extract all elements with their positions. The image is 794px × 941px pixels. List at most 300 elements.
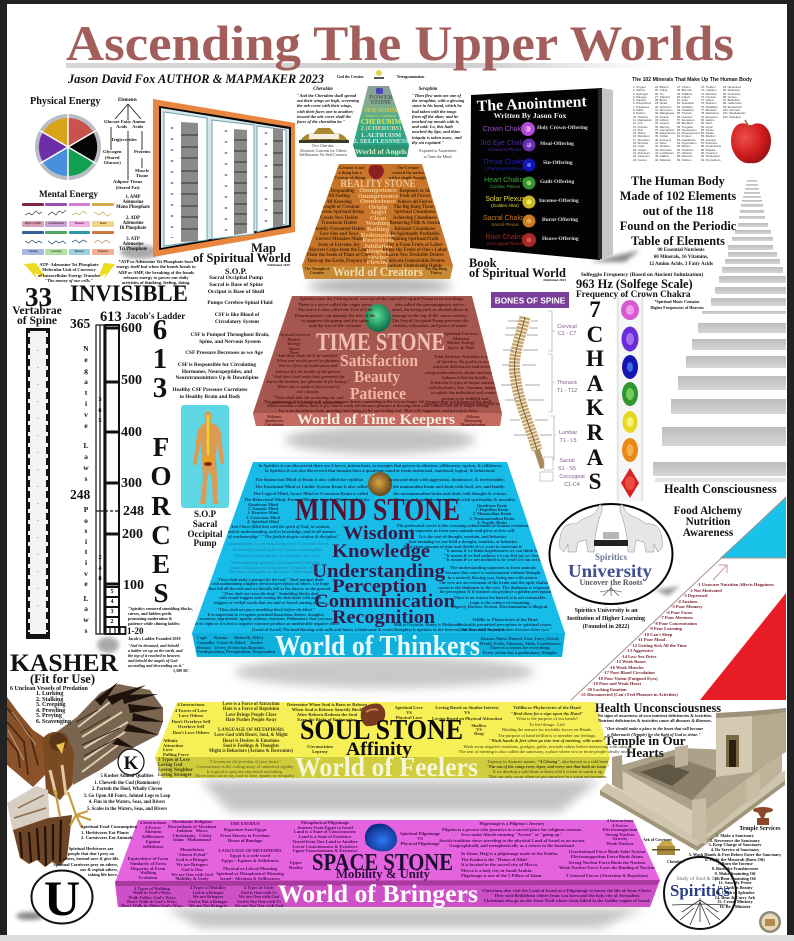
text: soul stone content: This can only occur when we put ourselves in a warm environment.	[488, 774, 608, 779]
figure: spine bones	[501, 311, 556, 481]
text: space stone content: Christians also go on the Jesus Trail where Jesus hiked in the Galilee region of Israel.	[484, 898, 650, 903]
text: space stone content: Geographically and metaphorically as a return to the homeland.	[449, 843, 575, 848]
text: mind stone content: Quadrune Mind	[248, 502, 278, 507]
text: minerals columns: 67. Hafnium	[677, 151, 692, 155]
text: soul stone content: Wash away negative emotions, grudges, guilts, towards others before interacting with others.	[463, 744, 631, 748]
text: soul stone content: Deep	[474, 731, 484, 736]
text: spiritual music: Higher Frequencies of Heavens	[650, 304, 704, 310]
text: reality stone content: Achieving Cleanliness	[393, 216, 437, 221]
text: space stone content: Descendants of Abraham	[168, 824, 216, 829]
heading: 365: 365	[70, 316, 90, 331]
text: services items: 7. Burn the Incense	[717, 861, 753, 866]
text: space stone content: We are Not Bringers	[189, 903, 227, 908]
text: kosher qualities	[84, 774, 170, 812]
text: time stone content: Measuring	[464, 419, 482, 423]
text: book chakra labels: Coccygeal Plexus	[487, 240, 523, 246]
staircase	[653, 180, 786, 482]
text: reality stone content: Making Spiritual Profit	[391, 237, 439, 242]
text: reality stone content: Redemption	[361, 232, 395, 238]
text: spiritual food	[81, 824, 138, 840]
text: mind stone content: triggers or verbal words that are said or heard causing a crime	[214, 600, 326, 605]
heading: 7 chakras	[586, 297, 604, 494]
text: soul stone content: The tent of meeting is also called the sanctuary, a place where two or more people ideally interact.	[459, 749, 635, 754]
text: mind stone content: "And they shall be for frontlets between thine eyes."	[458, 627, 552, 632]
text: minerals columns: 58. Beryllium	[677, 121, 693, 125]
text: energy tree labels: Glycogen	[103, 149, 121, 154]
text: minerals columns: 78. Ruthenium	[701, 111, 719, 115]
mind stone virtues: Wisdom	[343, 523, 415, 544]
text: minerals columns: 39. Cobalt	[655, 134, 668, 138]
text: mind stone content: name of an object in front of you in hand to feel it.	[231, 565, 319, 570]
text: spiritics stumbling note: "Spiritics removed stumbling blocks,	[128, 606, 193, 611]
text: ladder scale numbers: 1-20	[127, 626, 144, 636]
icon: ark of covenant	[652, 841, 680, 855]
text: reality stone content: The Big Bang	[425, 267, 447, 271]
text: reality stone content: Knows all Forces	[398, 200, 432, 205]
heading: 6 1 3: 6	[153, 314, 167, 346]
text: services items: 15. Create Ministry	[717, 899, 753, 904]
text: space stone content: Metaphorical Pilgrimage	[301, 820, 349, 825]
text: nutrition deficiency list: -7 Poor Alertness	[660, 615, 693, 620]
text: minerals columns: 8. Sulfur	[633, 108, 643, 112]
text: minerals columns: 87. Polonium	[701, 141, 717, 145]
text: mind stone content: Understanding is conceptualizing the 613 invisible forces	[228, 541, 328, 546]
text: negative laws vertical: a	[84, 452, 88, 461]
text: time stone content: Space	[289, 346, 299, 350]
text: minerals columns: 70. Thulium	[701, 85, 716, 89]
text: mind stone content: for perception & if trained can produce a golden perception.	[440, 589, 552, 594]
text: space stone content: LANGUAGE OF METAPHORS	[218, 848, 282, 853]
text: mind stone content: The eyes are an extension of the brain and the optic thalamus	[439, 580, 553, 585]
text: soul stone content: Love Brings People Close	[226, 713, 276, 718]
heading: kasher: KASHER	[10, 648, 118, 677]
text: minerals columns: 12. Iron	[633, 121, 642, 125]
text: mind stone content: Desirable permitted perception or spiritual vision.	[458, 622, 552, 627]
heading: 6 1 3: 1	[153, 343, 167, 375]
text: nutrition deficiency list: -14 Low Sex Drive	[621, 654, 656, 658]
text: minerals columns: 72. Rhenium	[701, 92, 717, 96]
text: space stone content: God is One	[181, 867, 203, 872]
seal: spiritics roots: Spiritics	[670, 881, 730, 900]
text: minerals columns: 53. Tantalum	[677, 105, 693, 109]
ark of cherubs icon	[299, 128, 349, 143]
icon: ATP lightning bolts	[24, 263, 115, 279]
text: minerals columns: 65. Erbium	[677, 144, 691, 148]
text: unclean vessels: 6 Unclean Vessels of Predation	[10, 686, 88, 692]
seal: spiritics university: Spiritics	[595, 552, 627, 562]
text: spine region labels: Cervical	[557, 324, 577, 330]
text: seraphim quote: touched my mouth with it,	[412, 119, 459, 124]
text: space stone content: 4 Interactions	[140, 820, 166, 825]
text: book chakra labels: Heave-Offering	[542, 236, 579, 242]
text: space stone content: Lower Consciousness & Existence	[292, 844, 358, 849]
text: time stone content: one's beauty.	[296, 389, 320, 394]
text: ATP currency: "The money of our cells."	[45, 278, 93, 283]
text: ladder scale numbers: 500	[121, 373, 142, 388]
text: time stone content: Space, & Time	[448, 345, 474, 350]
text: seraphim quote: thy sin expiated."	[412, 140, 444, 145]
text: minerals columns: 68. Holmium	[677, 154, 693, 158]
text: time stone content: anoint it upon his head, and anoint him."	[270, 400, 346, 405]
text: mind stone content: (Land of Israel) The land flowing with milk and honey (wholesome & sweet thoughts) is upstairs in the heavens, the heavenly, the mind	[252, 627, 504, 632]
text: minerals columns: 75. Platinum	[701, 101, 717, 105]
text: minerals columns: 16. Rubidium	[633, 134, 649, 138]
text: space stone content: Travel from One Land to Another	[292, 839, 358, 844]
heading: 7 chakras: H	[586, 346, 604, 371]
text: nutrition deficiency list: -2 Not Motivated	[689, 588, 722, 592]
text: space stone content: Walking	[140, 870, 156, 875]
text: minerals columns: 20. Copper	[633, 148, 647, 152]
text: soul stone content: The purpose of hand tefillin is to member our feelings.	[498, 732, 596, 738]
text: time stone content: Calculating	[265, 423, 283, 427]
text: mind stone content: It separates us from most animals and gives us free will.	[411, 528, 515, 533]
text: minerals columns: 35. Cesium	[655, 121, 669, 125]
text: predation list: 5. Preying	[36, 713, 62, 719]
text: soul stone content: Hate Pushes People Away	[225, 718, 277, 723]
text: nutrition deficiency list: -21 Disconnected (Can't Feel Pleasure in Activities)	[580, 692, 678, 697]
text: nutrition deficiency list: -11 Poor Mood	[637, 637, 665, 642]
text: ATP currency: of Intracellular Energy Transfer	[38, 273, 100, 278]
text: kosher qualities: 3. Go Upon All Fours, Jointed Legs to Leap	[84, 794, 170, 798]
text: reality stone content: Omniscience	[360, 198, 396, 205]
text: jacob's ladder quote: ascending and descending on it."	[128, 663, 184, 668]
map shadow	[120, 245, 160, 259]
text: reality stone content: Creator of things	[334, 175, 366, 180]
pyramid shadow: mind	[235, 656, 535, 688]
text: energy tree labels: Elements	[118, 98, 137, 103]
text: space stone content: Mecca is a holy city in Saudi Arabia.	[461, 868, 532, 872]
text: space stone content: Pilgrimage is a Pilgrim's Journey	[479, 821, 545, 826]
text: minerals columns: 80. Helium	[701, 118, 714, 122]
text: soul stone content: "Put out of the camp every leper, and every one that hath an issue."	[487, 764, 609, 769]
text: book chakra labels: Sacral Chakra	[483, 215, 527, 222]
text: mind stone content: emotions, ingratitude, apathy, actions, reactions. Defamatory that you may	[199, 616, 333, 621]
pyramid shadow: space	[165, 908, 645, 928]
text: space stone content: God is Not a Bringer	[188, 898, 228, 904]
heading: forces: F	[153, 432, 169, 462]
text: jacob's ladder quote	[128, 636, 189, 673]
text: minerals columns: 44. Lanthanum	[655, 151, 674, 155]
text: seraphim quote: "Then flew unto me one of	[412, 93, 461, 98]
text: minerals columns: 32. Manganese	[655, 111, 674, 115]
text: nutrition deficiency list: -18 Poor Vision (Fatigued Eyes)	[597, 676, 658, 680]
heading: forces: C	[151, 520, 171, 550]
text: reality stone content: Removing Filth & Stench	[390, 221, 440, 226]
text: space stone content: It is located in the sacred city of Mecca.	[461, 862, 538, 867]
text: minerals columns: 7. Potassium	[633, 105, 649, 109]
text: minerals columns: 36. Mercury	[655, 125, 670, 129]
text: spine region labels: Lumbar	[559, 430, 577, 436]
text: mind stone content: with maintaining a higher, elevated perception of others. Use hope	[211, 581, 329, 586]
text: neurotransmitter labels: Memory	[75, 250, 84, 253]
text: reality stone content: Create New Habits	[320, 216, 358, 221]
text: angels pyramid content: 2 (CHERUBS)	[361, 125, 401, 132]
text: mind stone content: 1. Reptilian Brain	[476, 507, 508, 512]
text: minerals columns: 90. Francium	[701, 151, 717, 155]
text: space stone content: Electromagnetism	[603, 827, 637, 832]
text: spine region labels: C1 - C7	[558, 331, 576, 337]
heading: 33 vertabrae: 33	[25, 282, 52, 312]
text: minerals columns: 3. Hydrogen	[633, 92, 648, 96]
text: S.O.P. explanation: Neurotransmitters Up & DownSpine	[175, 375, 259, 381]
icon: U circle: U	[44, 870, 80, 926]
heading: the human body: out of the 118	[643, 204, 713, 218]
text: soul stone content: "Circumcise the foreskin of your heart."	[209, 759, 281, 764]
heading: jacob's ladder: Jacob's Ladder	[126, 310, 185, 320]
text: sop pump label: Sacral	[193, 519, 217, 529]
temple illustration	[600, 708, 786, 851]
text: minerals columns: 66. Ytterbium	[677, 148, 694, 152]
text: time stone content: tension, relaxation, and peace of mind.	[393, 323, 467, 328]
heading: health consciousness: Health Consciousness	[664, 482, 777, 496]
text: space stone content: Upper Consciousness & Existence	[292, 848, 358, 853]
text: minerals columns	[633, 85, 746, 162]
text: time stone content: Alchemy	[466, 415, 480, 419]
text: space stone content: We are Bringers	[176, 862, 208, 867]
text: S.O.P. explanation: Pumps Cerebro-Spinal Fluid	[207, 300, 273, 306]
time stone virtues: Satisfaction	[340, 351, 419, 370]
text: space stone content: Spiritual Pilgrimage	[400, 831, 440, 836]
text: mind stone content: It is the seat of thought, emotion, and behavior.	[419, 534, 507, 539]
text: space stone content: Journey from Egypt to Israel	[297, 825, 353, 830]
heading: vertabrae of spine	[12, 305, 62, 326]
text: time stone content: to satisfy the individual and create a	[431, 390, 499, 395]
text: time stone content: carbohydrates, fats, vitamins, minerals,	[428, 385, 502, 390]
text: minerals columns: 37. Germanium	[655, 128, 674, 132]
text: cherubim quote: toward the ark-cover shall the	[297, 114, 351, 119]
text: minerals columns: 30. Selenium	[655, 105, 671, 109]
text: minerals columns: 69. Terbium	[677, 158, 692, 162]
text: nutrition deficiency list: -3 Depressed	[683, 593, 708, 598]
mind stone virtues: Recognition	[332, 607, 435, 628]
text: jacob's ladder quote: 1,500 BC	[173, 668, 189, 673]
text: spine region labels	[556, 324, 585, 488]
text: reality stone content: Feels all Forces	[400, 194, 430, 199]
heading: 6 1 3: 3	[153, 372, 167, 404]
text: carnivores: use & exploit others,	[80, 867, 118, 872]
text: space stone content: Egoism	[146, 839, 160, 844]
text: reality stone content: Sowing	[368, 254, 388, 261]
icon: laver bowl	[753, 807, 773, 825]
text: time stone content: (Heaven)	[453, 336, 469, 341]
heading: mind stone: MIND STONE	[295, 491, 460, 527]
heading: food alchemy nutrition awareness: Awareness	[683, 527, 733, 539]
text: space stone content: Walk in God's Ways	[133, 890, 171, 895]
text: seraphim quote: from off the altar; and he	[412, 114, 458, 119]
text: mind stone content: The same rule applies to the forces: Need tangibles."	[229, 569, 321, 574]
text: services items: 9. Make Anointing Oil	[715, 871, 755, 876]
text: predation list: 3. Creeping	[36, 702, 66, 708]
arrow: rising awareness	[713, 565, 727, 580]
text: time stone content: Physical Universe	[278, 332, 310, 337]
mind stone virtues	[312, 523, 455, 628]
text: soul stone content: Heart is Desires & Emotions	[223, 739, 279, 744]
text: time stone content: Joy is an abundance from spending time being joyful and feeling real, filled with happiness, and present in time.	[278, 408, 478, 413]
text: unconsciousness description: Nutrient deficiencies & toxicities cause all diseases & illnesses.	[598, 718, 712, 722]
text: kosher qualities: 5 Kosher Animal Qualities	[101, 774, 153, 779]
heading: affinity: Affinity	[346, 739, 413, 760]
text: sop pump label: S.O.P	[194, 509, 216, 519]
text: space stone content: Mobility & Unity	[175, 876, 209, 881]
text: minerals columns: 52. Scandium	[677, 101, 694, 105]
text: jacob's ladder quote: Jacob's Ladder Founded 2019	[128, 636, 181, 641]
text: energy tree labels: Adipose Tissue	[113, 179, 142, 184]
text: minerals columns: 98. Californium	[723, 101, 742, 105]
text: minerals columns: 55. Thorium	[677, 111, 692, 115]
text: positive laws vertical: w	[83, 615, 89, 624]
text: positive laws vertical: P	[84, 505, 88, 514]
text: soul stone content: To feel things...Life	[529, 722, 565, 726]
text: book chakra labels: Solar Plexus	[485, 196, 525, 203]
text: reality stone content: Harvest Crops from the Land	[309, 248, 369, 253]
text: minerals columns: 26. Tin	[655, 92, 663, 96]
text: space stone content: Judaism Moses	[176, 828, 208, 833]
text: space stone content: "Adonai Echad"	[176, 852, 208, 857]
text: space stone content: 4 Types of Walking	[134, 886, 170, 891]
text: time stone content: balanced diet for health.	[442, 375, 488, 380]
book shadow	[590, 250, 640, 262]
text: space stone content: Monotheism	[180, 847, 204, 852]
text: negative laws vertical: w	[83, 463, 89, 472]
seal: spiritics roots: Study of Soul & Spirit	[677, 875, 724, 882]
text: space stone content: VS	[417, 836, 423, 841]
text: neurotransmitter labels: Concentration	[48, 222, 64, 225]
text: mind stone content: It is important to recognize potential hazardous desires, thoughts,	[207, 612, 325, 616]
text: reality stone content: Correct Mistakes Made	[315, 237, 363, 242]
text: nutrition deficiency list: -5 Poor Memory	[671, 604, 703, 609]
text: time stone content: Apothecary	[265, 419, 283, 423]
text: 248 on rail: 4	[98, 564, 102, 572]
text: services items	[684, 834, 786, 910]
subtitle: author: Jason David Fox AUTHOR & MAPMAKER 2023	[67, 72, 324, 86]
text: space stone content: Selfishness	[143, 844, 163, 849]
text: ladder scale numbers: 100	[123, 578, 144, 593]
text: cherubim quote: Selflessness No Self Concern	[299, 152, 347, 157]
text: seraphim quote: to Tune the Mind.	[424, 154, 452, 158]
text: space stone content: 4 Forces	[145, 825, 161, 830]
text: space stone content: We are One with God	[239, 894, 279, 899]
heading: world of feelers: World of Feelers	[295, 752, 478, 782]
map of spiritual world	[153, 99, 295, 257]
text: positive laws vertical: v	[84, 569, 88, 578]
text: reality stone content: The Creator	[397, 165, 419, 170]
text: carnivores	[53, 862, 118, 877]
text: nutrition deficiency list: -4 Anxious	[677, 598, 697, 604]
text: mind stone content: Milk is Oxytocin, Honey is Melatonin	[394, 622, 460, 627]
text: minerals columns: 9. Sodium	[633, 111, 646, 115]
text: positive laws vertical: i	[85, 537, 87, 546]
panel: world of creators pyramid	[302, 164, 453, 279]
text: minerals columns: 82. Argon	[701, 125, 713, 129]
text: minerals columns: 54. Vanadium	[677, 108, 694, 112]
text: minerals columns: 88. Protactinium	[701, 144, 721, 148]
text: space stone content: Electromagnetism Force Binds Atoms	[571, 854, 643, 859]
time stone virtues	[340, 351, 419, 403]
text: reality stone content: a thing but a	[338, 170, 362, 175]
text: mind stone content: 4. Angelic Brain	[477, 520, 507, 525]
text: minerals columns: 46. Tellurium	[655, 158, 671, 162]
text: reality stone content: Jubilation	[364, 243, 392, 250]
text: minerals columns: 29. Nickel	[655, 101, 667, 105]
text: mind stone content: The Behavioral Mind, Present Mind or Angelic Mind is called the Human or Angelic brain and deals with spirituality & morality.	[244, 497, 516, 502]
heading: the human body: Table of Elements	[631, 234, 725, 248]
text: time stone content: Alchemy	[267, 415, 281, 419]
text: seraphim quote: Expiated is Atonement,	[419, 148, 457, 153]
text: minerals columns: 77. Rhodium	[701, 108, 717, 112]
text: positive laws vertical: s	[85, 526, 87, 535]
heading: soul stone: SOUL STONE	[300, 715, 463, 746]
text: mind stone content: that fall off the roof and we literally fall in the dust or on the ground.	[209, 586, 331, 591]
text: soul stone content: Affinity	[163, 738, 178, 743]
heading: forces: O	[150, 461, 172, 491]
text: space stone content: Spiritual or Metaphorical Meaning	[216, 871, 284, 876]
text: reality stone content: The Big Bang Theory	[393, 205, 437, 210]
text: S.O.P. explanation: Healthy CSF Pressure Correlates	[173, 387, 247, 393]
text: services items: 5. Wash Hands & Feet Before Enter the Sanctuary	[689, 852, 781, 857]
text: mind stone content: Logic Karma Butterfly Effect Causality Cause & Effect Justice Reason Every Action has Reaction Predisposition, Precipitation, Preparation	[197, 635, 275, 654]
text: soul stone content: Leprosy in Aramaic means, "A Closing", also known as a cold heart	[488, 759, 608, 764]
text: angels pyramid content: POWER	[369, 94, 393, 101]
heading: temple in our hearts: Temple in Our	[604, 733, 686, 748]
icon: sun above tetragrammaton	[374, 70, 384, 79]
text: 248 on rail: 8	[98, 575, 102, 582]
text: time stone content: Total Alchemy Nutrition is a part	[434, 354, 496, 359]
text: mind stone content: in a natural, flowing way, being one with nature.	[448, 575, 538, 580]
text: nutrition deficiency list: -20 Lacking Emotion	[586, 686, 627, 692]
text: mind stone content: for a given amount of time and decide if we want to entertain it.	[404, 544, 522, 549]
text: AMP ADP ATP: Adenosine	[123, 242, 143, 247]
text: mind stone content: "Thou shalt make a parapet for the roof." Roof parapet deals	[216, 577, 324, 582]
text: spiritual food: 1. Herbivores Eat Plants	[81, 830, 129, 834]
text: reality stone content: Face Sins and Vows	[319, 232, 359, 237]
text: soul stone content: Love is a Force of Attraction	[222, 702, 280, 707]
text: space stone content: Departure from Egypt	[223, 827, 267, 832]
text: mind stone content: The Emotional Mind or Limbic System Brain is also called the mammalian brain and deals with food, sex, and family.	[255, 484, 505, 489]
text: positive laws vertical: a	[84, 604, 88, 613]
text: minerals columns: 24. Barium	[655, 85, 669, 89]
text: services items: 6. Light the Menorah (Burn Oil)	[705, 857, 765, 862]
time stone virtues: Patience	[350, 384, 406, 403]
text: angels pyramid content: SERAPHIM	[364, 107, 398, 114]
text: minerals columns: 71. Lutetium	[701, 88, 716, 92]
text: reality stone content: Angel	[370, 209, 386, 216]
text: positive laws vertical: e	[84, 579, 88, 588]
text: time stone content: person to be fulfilled and	[442, 396, 488, 401]
text: mind stone content: There is no reason for hatred, it is not reasonable.	[454, 595, 546, 600]
text: space stone content: Christianity Christ	[173, 833, 211, 838]
diagram: energy tree lines	[111, 104, 142, 180]
heading: food alchemy nutrition awareness: Food Alchemy	[674, 505, 742, 517]
text: reality stone content: Cultivate Undesirable Desires	[385, 259, 445, 264]
text: reality stone content: All Knowing	[326, 200, 352, 205]
text: soul stone content: It is good to practice emotional unloading.	[207, 769, 283, 774]
text: neurotransmitter labels: Euphoria	[98, 250, 108, 253]
text: space stone content: From Slavery to Freedom	[220, 833, 270, 838]
text: time stone content: The quickening of it is patient & when someone desires something in life it is no longer felt because time is felt from within itself.	[264, 399, 492, 404]
text: minerals columns: 84. Radon	[701, 131, 714, 135]
text: spine region labels: S1 - S5	[558, 466, 576, 472]
text: cherubim quote: Cherubim	[313, 87, 333, 92]
text: nutrition deficiency list: -16 Weak Muscles	[609, 664, 644, 670]
text: mind stone content: Quadrune Brain	[477, 503, 507, 508]
text: S.O.P. explanation: Circulatory System	[215, 319, 259, 325]
text: cherubim quote: Altruistic Concern for Others	[300, 148, 346, 153]
text: reality stone content	[304, 166, 447, 275]
text: minerals columns: 79. Europium	[701, 115, 718, 119]
heading: 7 chakras: S	[589, 469, 601, 494]
text: soul stone content: Soul is Feelings & Thoughts	[223, 744, 279, 749]
text: mind stone content: Every action has a preliminary thought.	[483, 650, 557, 655]
